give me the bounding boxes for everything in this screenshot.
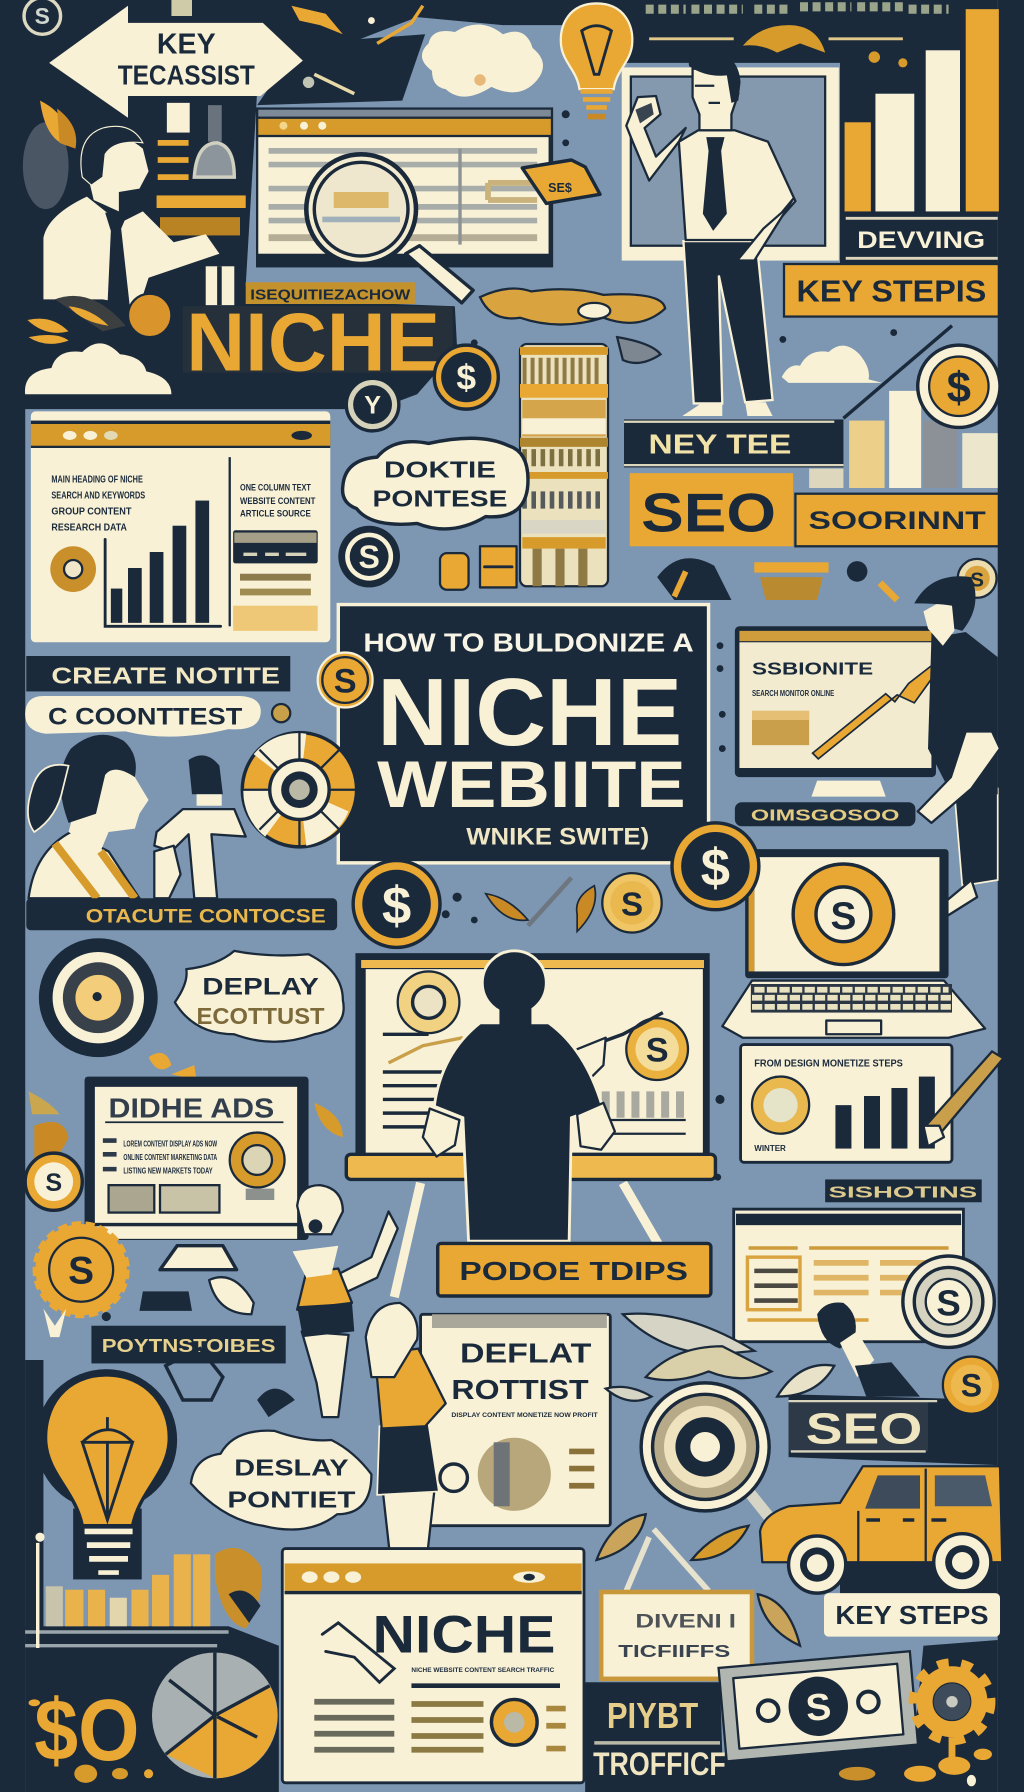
top [375, 1349, 446, 1429]
neck and face [69, 757, 149, 851]
screen coin s [626, 1018, 688, 1080]
shorts [377, 1424, 439, 1495]
gear coin: S [68, 1249, 94, 1292]
label: devving [846, 218, 998, 258]
label: devving: DEVVING [857, 227, 985, 254]
coin stack [520, 344, 608, 586]
coin: growth: $ [947, 364, 971, 412]
label: soorinnt: SOORINNT [809, 507, 987, 535]
panel: right bar chart: WINTER [754, 1144, 786, 1153]
coin: large dollar: $ [382, 876, 411, 935]
easel legs [394, 1183, 661, 1297]
top [297, 1269, 352, 1310]
tie [105, 213, 130, 331]
money symbol: $o: $O [34, 1682, 139, 1779]
arrow sign: key tecassist [49, 6, 303, 118]
browser: bar chart panel: RESEARCH DATA [51, 522, 127, 533]
leaves cluster [597, 1314, 834, 1646]
coin: gold right: S [961, 1368, 982, 1404]
label: portfolios [91, 1326, 286, 1363]
monitor: didhe ads: DIDHE ADS [109, 1093, 274, 1124]
right forearm [737, 199, 793, 261]
panel sidebar: ONE COLUMN TEXT [240, 482, 311, 492]
poster: deflat rottist [421, 1314, 610, 1526]
poster: deflat rottist: DISPLAY CONTENT MONETIZE NOW PROFIT [451, 1412, 599, 1419]
skirt [297, 1303, 354, 1337]
label: sishotins [825, 1179, 982, 1202]
pencil sticks [626, 1529, 709, 1591]
cloud: dokite pontese: PONTESE [373, 485, 507, 511]
coin: window s [903, 1256, 994, 1347]
certificate: TICFIIFFS [618, 1641, 730, 1661]
label: soorinnt [795, 494, 999, 546]
coin: left edge: S [45, 1169, 62, 1197]
poster: deflat rottist: DEFLAT [460, 1337, 592, 1368]
text: paybt traffic: TROFFICF [593, 1746, 726, 1782]
panel text: MAIN HEADING OF NICHE [51, 474, 143, 485]
text: paybt traffic [593, 1695, 726, 1782]
debris beside chart [166, 1349, 295, 1629]
label: podoe tdips: PODOE TDIPS [459, 1256, 688, 1286]
certificate [601, 1592, 752, 1679]
panel sidebar: ARTICLE SOURCE [240, 509, 311, 519]
monitor behind man [622, 67, 839, 261]
banknote [719, 1651, 918, 1761]
coin: large dollar right: $ [701, 839, 730, 898]
coin: growth [918, 345, 1000, 427]
coin: s [338, 526, 400, 587]
arrow sign: key tecassist: KEY [157, 29, 216, 61]
small bar chart [25, 1543, 229, 1648]
legs [302, 1331, 349, 1417]
label: oimsooo: OIMSGOSOO [751, 808, 899, 825]
label: create notite: CREATE NOTITE [51, 662, 280, 688]
browser: bar chart panel: SEARCH AND KEYWORDS [51, 490, 145, 501]
wheel chart [242, 733, 357, 847]
monitor: didhe ads [85, 1077, 309, 1270]
label: otacute contocse: OTACUTE CONTOCSE [86, 905, 326, 927]
certificate: DIVENI I [635, 1610, 736, 1632]
body [29, 832, 139, 898]
lower arm [887, 880, 977, 949]
coin: gold right [943, 1357, 1000, 1414]
right growth chart with coin [809, 326, 1000, 488]
browser: magnifier window [256, 107, 553, 303]
label: portfolios: POYTNSTOIBES [102, 1335, 275, 1356]
heading: niche: NICHE [186, 297, 440, 388]
pie chart [152, 1653, 278, 1778]
car [760, 1466, 1002, 1593]
coin: near title: S [334, 663, 357, 701]
cloud: deplay ecottust: ECOTTUST [197, 1003, 325, 1029]
coin: dollar: $ [456, 358, 476, 398]
monitor: didhe ads: LOREM CONTENT DISPLAY ADS NOW [123, 1139, 217, 1148]
cloud: deslay pontiet [191, 1431, 371, 1530]
debris near stack [480, 288, 665, 363]
shorts [954, 789, 998, 886]
gear coin [35, 1224, 127, 1315]
screen stripes [606, 1091, 680, 1118]
gold tag: SE$ [548, 181, 572, 195]
coin: gold s [602, 873, 662, 933]
label: seo gold: SEO [641, 481, 776, 543]
man from behind [423, 951, 663, 1241]
feet [682, 402, 773, 416]
coin: near title [318, 653, 373, 707]
cloud: deslay pontiet: DESLAY [234, 1454, 349, 1480]
cloud: left [25, 343, 171, 394]
tee [928, 632, 998, 800]
top right scribbles [646, 7, 949, 67]
title: niche: NICHE [377, 659, 682, 766]
bottom left sparks [29, 1533, 153, 1783]
coin: s: S [358, 539, 380, 575]
lightbulb: top [561, 3, 632, 117]
label: sishotins: SISHOTINS [829, 1185, 978, 1202]
screen coin s: S [646, 1032, 669, 1070]
coin: top left: S [35, 3, 50, 29]
head [297, 1185, 343, 1234]
browser: bar chart panel: GROUP CONTENT [51, 506, 132, 517]
coin: yen: Y [364, 392, 381, 420]
laptop: S [830, 895, 856, 938]
person: hair head [817, 1303, 920, 1397]
lightbulb: large [46, 1375, 169, 1573]
scattered debris [657, 558, 897, 600]
coin: dollar [434, 345, 498, 409]
target [39, 938, 158, 1057]
panel chart [105, 501, 221, 626]
arm [918, 731, 1000, 823]
coin: left edge [25, 1153, 82, 1210]
pill: c coontest: C COONTTEST [48, 704, 243, 731]
small banner above niche: ISEQUITIEZACHOW [250, 287, 410, 303]
cloud: deplay ecottust [175, 951, 344, 1042]
face [923, 594, 954, 646]
desk bar [346, 1154, 715, 1179]
cloud: dokite pontese: DOKTIE [384, 457, 496, 483]
hair [61, 735, 136, 823]
gold tag [522, 160, 600, 203]
cloud: deslay pontiet: PONTIET [227, 1486, 355, 1512]
cloud: top [422, 25, 543, 97]
coin: window s: S [936, 1282, 961, 1323]
arrow sign: key tecassist: TECASSIST [118, 60, 255, 91]
woman: ponytail [28, 735, 149, 898]
monitor: didhe ads: LISTING NEW MARKETS TODAY [123, 1167, 213, 1176]
label: oimsooo [735, 802, 915, 826]
head [689, 51, 741, 130]
small icons [43, 1277, 254, 1337]
text: paybt traffic: PIYBT [607, 1695, 698, 1736]
legs [383, 1491, 434, 1609]
title panel [338, 605, 709, 863]
gear [913, 1663, 991, 1760]
raised arm [626, 96, 686, 181]
panel sidebar [233, 482, 318, 631]
poster: deflat rottist: ROTTIST [451, 1374, 589, 1405]
title: website: WEBIITE [377, 748, 686, 822]
window: right table [734, 1209, 963, 1342]
screen coin [398, 971, 459, 1033]
cloud: deplay ecottust: DEPLAY [202, 973, 319, 1000]
panel: right bar chart [741, 1045, 952, 1162]
pencil [923, 1051, 1003, 1146]
magnifier [306, 154, 473, 303]
small gold icons [440, 546, 517, 590]
right monitor with arrow: SSBIONITE [752, 658, 873, 678]
man: standing with tie [626, 51, 795, 416]
title subtitle: WNIKE SWITE) [466, 824, 649, 851]
banknote: S [804, 1685, 833, 1729]
man: right leaning [887, 576, 1000, 949]
target magnifier [641, 1383, 771, 1520]
cloud: dokite pontese [343, 438, 528, 529]
coin: large dollar right [672, 823, 759, 910]
label: podoe tdips [438, 1243, 711, 1296]
right monitor with arrow: SEARCH MONITOR ONLINE [752, 689, 835, 698]
tie [703, 137, 727, 231]
label: seo gold [630, 473, 793, 546]
label: seo banner [789, 1400, 937, 1453]
label: ney tee: NEY TEE [649, 429, 791, 460]
gold pile [839, 1749, 992, 1786]
label: key steps small: KEY STEPS [835, 1600, 989, 1630]
browser: bar chart panel [31, 411, 330, 642]
leaves and coin [55, 296, 126, 331]
coin: s small right [958, 559, 997, 598]
label: seo banner: SEO [806, 1405, 922, 1453]
leaves and texture [23, 101, 76, 344]
top ornaments [171, 0, 949, 94]
browser: niche: NICHE WEBSITE CONTENT SEARCH TRAFFIC [411, 1667, 554, 1674]
shelf objects [157, 103, 246, 305]
right monitor with arrow [735, 626, 944, 797]
figure: small sketch [154, 755, 246, 898]
head [87, 136, 149, 211]
pill: c coontest [25, 696, 261, 737]
arm [338, 1211, 398, 1294]
browser: niche [282, 1549, 584, 1783]
hair [914, 576, 976, 631]
gold straps [55, 843, 135, 898]
label: otacute contocse [26, 898, 337, 930]
monitor: didhe ads: ONLINE CONTENT MARKETING DATA [123, 1153, 217, 1162]
cloud: small right [779, 329, 897, 383]
woman: back view [366, 1303, 446, 1609]
top right bar chart [845, 9, 999, 211]
center monitor with man [346, 951, 715, 1297]
label: create notite [26, 656, 290, 691]
label: ney tee [624, 419, 843, 467]
panel: right bar chart: FROM DESIGN MONETIZE STEPS [754, 1058, 903, 1069]
coin: yen [346, 378, 399, 431]
shirt [679, 130, 795, 240]
panel: left man at shelf [23, 101, 246, 344]
screen lines [383, 1034, 457, 1127]
laptop [722, 849, 985, 1038]
pants [683, 241, 773, 403]
coin: small gold [272, 704, 290, 722]
title line: how to: HOW TO BULDONIZE A [363, 627, 694, 657]
leaves around center left [29, 878, 595, 1161]
coin: s small right: S [970, 568, 984, 591]
coin: large dollar [353, 861, 440, 947]
shirt [43, 197, 219, 306]
coin: top left [24, 0, 61, 34]
coin: gold s: S [621, 886, 643, 923]
coin speck details [442, 110, 726, 1181]
browser: niche: NICHE [373, 1606, 555, 1665]
label: key steps small [824, 1593, 1000, 1637]
panel sidebar: WEBSITE CONTENT [240, 496, 316, 506]
hair [366, 1303, 418, 1377]
label: key steps: KEY STEPIS [797, 274, 986, 309]
small banner above niche [246, 282, 415, 304]
woman: small with skirt [293, 1185, 398, 1417]
label: key steps [784, 264, 999, 317]
